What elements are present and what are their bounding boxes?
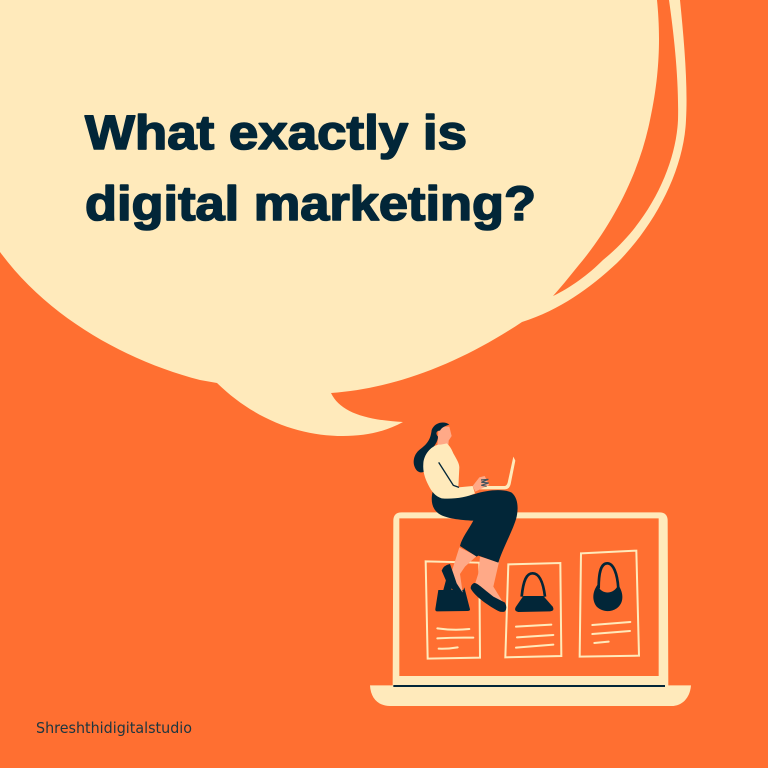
- illustration: woman sitting on laptop: [370, 423, 691, 706]
- bubble crescent cutout: [553, 0, 678, 296]
- title line 1: What exactly is: [85, 107, 467, 160]
- sleeve line: [439, 462, 459, 487]
- speech bubble: [0, 0, 687, 436]
- footer credit: Shreshthidigitalstudio: [36, 719, 192, 737]
- hair: [414, 423, 449, 472]
- title: [85, 107, 536, 231]
- neck and face: [437, 427, 452, 446]
- laptop screen frame: [393, 512, 668, 687]
- product card 1: [426, 561, 480, 659]
- legs: [452, 547, 477, 593]
- title line 2: digital marketing?: [85, 178, 536, 231]
- bag 1: [435, 580, 470, 611]
- woman: [414, 423, 518, 612]
- bag 2: [515, 573, 553, 612]
- sweater: [423, 443, 475, 499]
- shoe left: [442, 564, 463, 595]
- bubble body: [0, 0, 687, 436]
- shoe right: [471, 583, 506, 612]
- product card 3: [580, 551, 639, 657]
- fingers: [481, 479, 489, 486]
- laptop base: [370, 685, 691, 706]
- small laptop: [480, 457, 515, 489]
- hand: [473, 476, 489, 492]
- bag 3: [593, 563, 622, 611]
- product card 2: [505, 563, 561, 657]
- laptop base line: [393, 683, 665, 689]
- skirt: [432, 490, 518, 563]
